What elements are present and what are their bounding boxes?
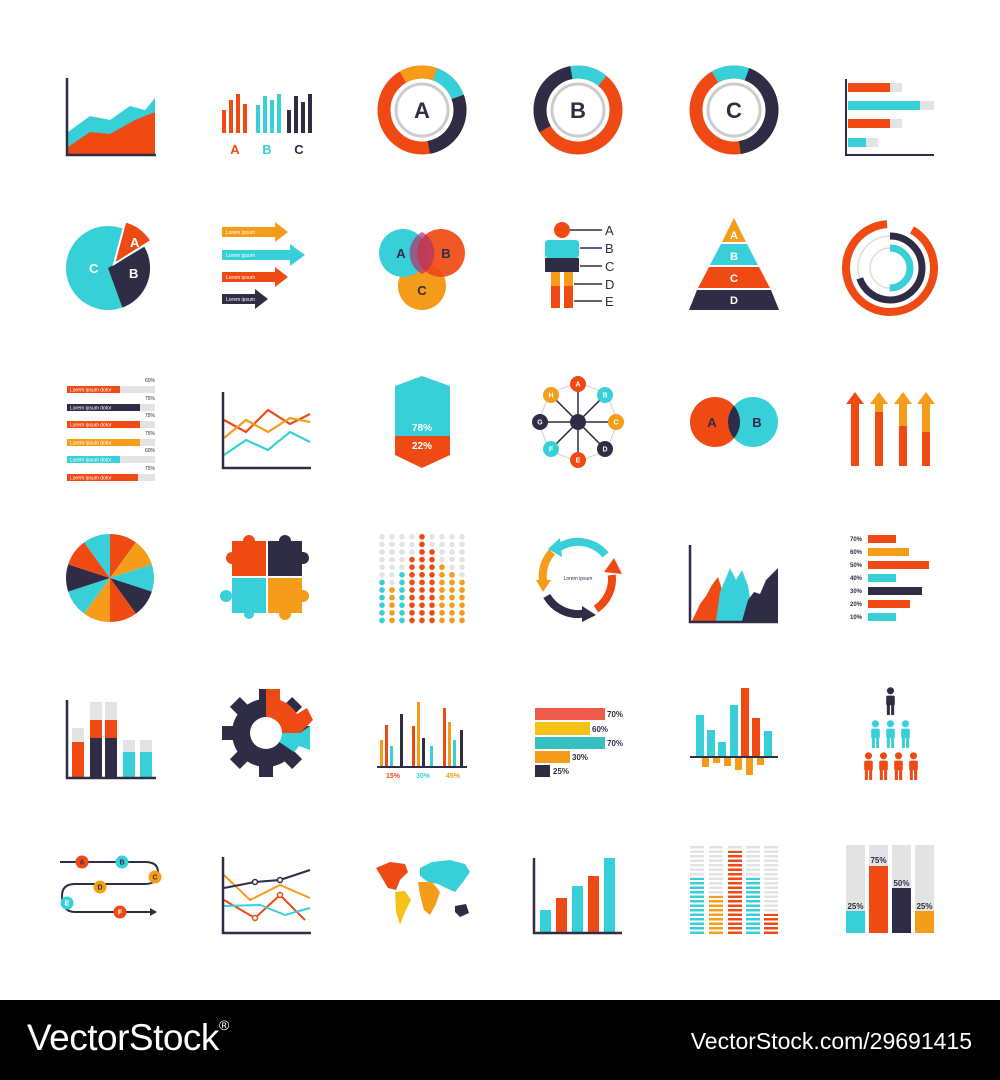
icon: percentage columns: 75% bbox=[870, 856, 887, 865]
icon: progress list: Lorem ipsum dolor bbox=[70, 422, 112, 428]
icon: progress list: 75% bbox=[145, 396, 156, 402]
icon: timeline path: D bbox=[97, 884, 103, 892]
icon: progress list bbox=[67, 378, 156, 482]
icon: percent bars: 50% bbox=[850, 563, 863, 569]
icon: venn two: A bbox=[707, 415, 717, 430]
icon: mountain area chart bbox=[690, 545, 778, 622]
icon: progress list: Lorem ipsum dolor bbox=[70, 440, 112, 446]
icon: arrows list: Lorem ipsum bbox=[226, 275, 255, 281]
icon: pie chart ABC: C bbox=[89, 261, 99, 276]
icon: rising bars bbox=[534, 858, 622, 933]
icon: network: G bbox=[537, 420, 543, 426]
icon: progress list: Lorem ipsum dolor bbox=[70, 476, 112, 482]
icon: percent bars: 40% bbox=[850, 576, 863, 582]
icon: arrows list: Lorem ipsum bbox=[226, 253, 255, 259]
icon: stepped horizontal bars: 30% bbox=[572, 753, 588, 762]
icon: network: A bbox=[575, 382, 581, 388]
icon: network bbox=[532, 376, 624, 468]
icon: percent bars: 60% bbox=[850, 550, 863, 556]
icon: network: H bbox=[548, 392, 554, 400]
icon: timeline path bbox=[60, 856, 162, 918]
icon: line chart bbox=[223, 392, 311, 468]
icon: shield percent: 78% bbox=[412, 423, 432, 434]
icon: person with labels: C bbox=[605, 259, 614, 274]
icon: pyramid bbox=[689, 218, 779, 310]
icon: progress list: 75% bbox=[145, 466, 156, 472]
icon: progress list: Lorem ipsum dolor bbox=[70, 458, 112, 464]
icon: percent bars: 30% bbox=[850, 589, 863, 595]
icon: concentric rings bbox=[830, 208, 950, 328]
icon: clustered bars with labels: 30% bbox=[416, 773, 431, 780]
icon: pyramid: A bbox=[730, 230, 738, 242]
icon: percent bars: 70% bbox=[850, 537, 863, 543]
icon: network: E bbox=[576, 458, 581, 464]
icon: area chart bbox=[67, 78, 156, 155]
icon: gear bbox=[222, 689, 313, 777]
icon: progress list: Lorem ipsum dolor bbox=[70, 388, 112, 394]
icon: donut C: C bbox=[726, 98, 742, 123]
icon: world map bbox=[376, 860, 470, 925]
icon: cycle arrows bbox=[536, 538, 622, 622]
icon: stepped horizontal bars: 70% bbox=[607, 710, 623, 719]
icon: timeline path: A bbox=[79, 860, 85, 866]
icon: venn two: B bbox=[752, 415, 762, 430]
icon: pie chart ABC bbox=[66, 222, 151, 310]
icon: network: C bbox=[613, 420, 619, 426]
icon: network: B bbox=[602, 392, 608, 400]
icon: pyramid: D bbox=[730, 295, 738, 307]
icon: person with labels: E bbox=[605, 294, 614, 309]
icon: person with labels: A bbox=[605, 223, 614, 238]
icon: pie chart ABC: B bbox=[129, 266, 138, 281]
icon: stepped horizontal bars: 70% bbox=[607, 739, 623, 748]
footer logo text: VectorStock® bbox=[27, 1017, 229, 1058]
icon: multi line chart bbox=[223, 857, 311, 933]
icon: network: D bbox=[602, 446, 608, 454]
icon: arrows list: Lorem ipsum bbox=[226, 230, 255, 236]
icon: clustered bars with labels: 15% bbox=[386, 773, 401, 780]
icon: stacked bars bbox=[67, 700, 156, 778]
footer url text: VectorStock.com/29691415 bbox=[691, 1028, 972, 1054]
icon: arrows list: Lorem ipsum bbox=[226, 297, 255, 303]
icon: grouped bars ABC: B bbox=[262, 142, 272, 157]
icon: pie chart ABC: A bbox=[130, 235, 140, 250]
icon: up arrows bbox=[846, 392, 935, 466]
icon: donut A bbox=[370, 58, 474, 162]
icon: person with labels: B bbox=[605, 241, 614, 256]
icon: timeline path: F bbox=[118, 910, 123, 916]
icon: cycle arrows: Lorem ipsum bbox=[564, 576, 592, 582]
icon: venn three: C bbox=[417, 283, 427, 298]
icon: positive negative bars bbox=[690, 688, 778, 775]
icon: progress list: Lorem ipsum dolor bbox=[70, 406, 112, 412]
icon: donut A: A bbox=[414, 98, 430, 123]
icon: person with labels: D bbox=[605, 277, 614, 292]
icon: stepped horizontal bars: 60% bbox=[592, 725, 608, 734]
icon: venn three: B bbox=[441, 246, 451, 261]
icon: progress list: 60% bbox=[145, 378, 156, 384]
footer bar bbox=[0, 1000, 1000, 1080]
icon: donut B: B bbox=[570, 98, 586, 123]
icon: grouped bars ABC bbox=[222, 94, 312, 157]
icon: progress list: 75% bbox=[145, 431, 156, 437]
icon: percentage columns: 25% bbox=[916, 902, 933, 911]
icon: percentage columns: 50% bbox=[893, 879, 910, 888]
icon: clustered bars with labels bbox=[377, 702, 467, 780]
icon: stepped horizontal bars: 25% bbox=[553, 767, 569, 776]
icon: timeline path: C bbox=[152, 874, 158, 882]
icon: venn three: A bbox=[396, 246, 406, 261]
icon: grouped bars ABC: A bbox=[230, 142, 240, 157]
icon: horizontal bars bbox=[846, 79, 934, 155]
icon: stepped horizontal bars bbox=[535, 708, 623, 777]
icon: percent bars bbox=[850, 535, 929, 621]
icon: ten-slice pie bbox=[66, 534, 154, 622]
icon: donut B bbox=[526, 58, 630, 162]
icon: venn three bbox=[379, 229, 465, 310]
icon: progress list: 75% bbox=[145, 413, 156, 419]
icon: puzzle bbox=[220, 535, 309, 620]
icon: progress list: 60% bbox=[145, 448, 156, 454]
icon: pyramid: B bbox=[730, 251, 738, 263]
icon: percentage columns: 25% bbox=[847, 902, 864, 911]
icon: timeline path: B bbox=[119, 860, 125, 866]
icon: percent bars: 20% bbox=[850, 602, 863, 608]
icon: percentage columns bbox=[846, 845, 934, 933]
icon: pyramid: C bbox=[730, 273, 738, 285]
icon: venn two bbox=[690, 397, 778, 447]
icon: arrows list bbox=[222, 222, 305, 309]
icon: network: F bbox=[549, 446, 554, 454]
icon: equalizer bbox=[690, 846, 778, 934]
icon: person with labels bbox=[545, 222, 614, 309]
icon: percent bars: 10% bbox=[850, 615, 863, 621]
icon: shield percent bbox=[395, 376, 450, 468]
icon: donut C bbox=[682, 58, 786, 162]
icon: timeline path: E bbox=[65, 900, 70, 908]
icon: shield percent: 22% bbox=[412, 441, 432, 452]
icon: clustered bars with labels: 45% bbox=[446, 773, 461, 780]
icon: people hierarchy bbox=[864, 687, 918, 780]
icon: dot matrix bbox=[377, 533, 467, 624]
icon: grouped bars ABC: C bbox=[294, 142, 304, 157]
